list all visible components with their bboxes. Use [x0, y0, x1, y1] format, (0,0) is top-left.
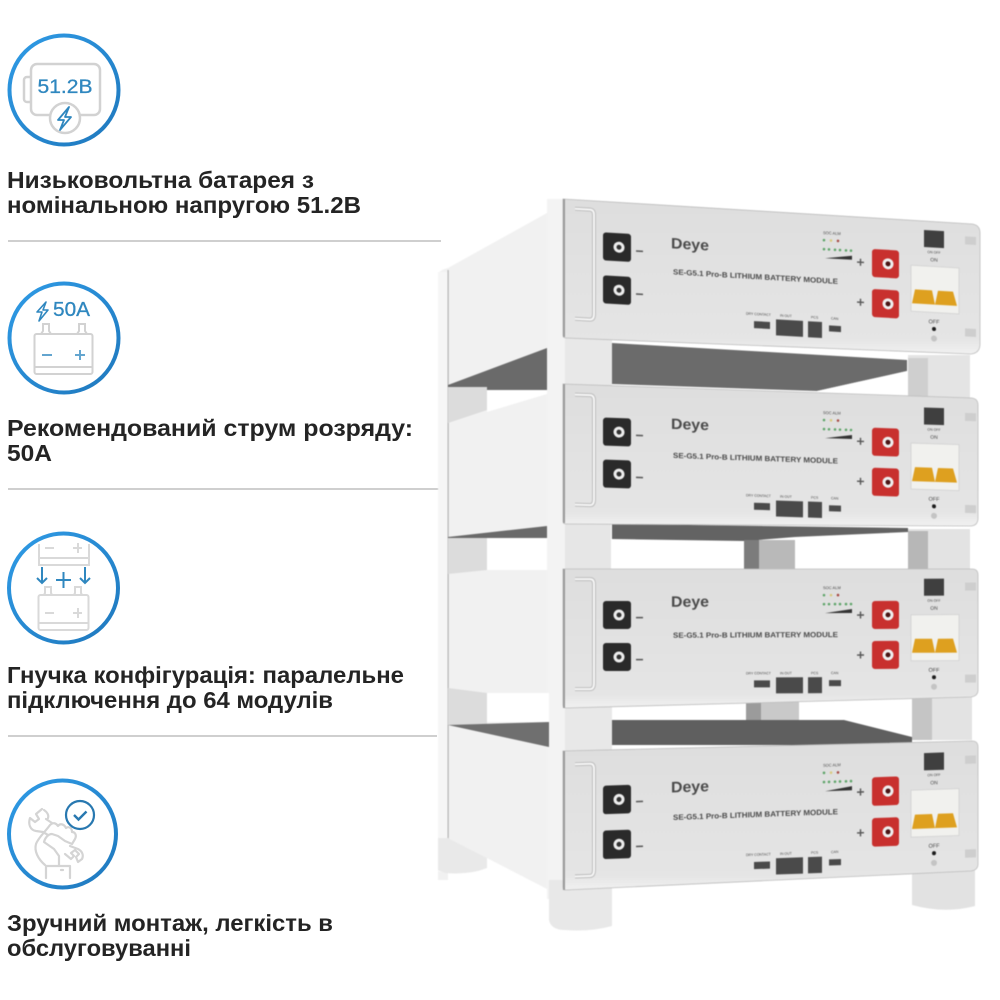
breaker: ON — [930, 257, 938, 264]
icon: 51.2V battery: 51.2В — [38, 77, 92, 98]
divider lines — [8, 240, 441, 737]
ports — [746, 312, 841, 339]
feature: nominal voltage — [7, 36, 361, 218]
ports — [746, 671, 841, 693]
gap two: under second module — [565, 522, 970, 570]
breaker: OFF — [929, 319, 940, 326]
gap one: under top module — [565, 338, 970, 400]
negative terminals — [603, 601, 643, 671]
handles — [575, 578, 976, 689]
gap three: under third module — [565, 695, 972, 753]
logo: Deye — [671, 594, 709, 611]
breaker — [911, 229, 959, 343]
module 2 — [563, 384, 978, 526]
module 4 controls — [575, 750, 976, 882]
feature: discharge current — [7, 284, 413, 466]
model label: SE-G5.1 Pro-B LITHIUM BATTERY MODULE — [673, 267, 838, 286]
ports: CAN — [831, 496, 839, 501]
breaker: OFF — [929, 843, 940, 850]
ports: PCS — [811, 671, 819, 675]
module 3 face — [563, 569, 978, 708]
heading: nominal voltage: Низьковольтна батарея з — [7, 167, 314, 193]
heading: nominal voltage: номінальною напругою 51.2В — [7, 192, 361, 218]
heading: easy installation: Зручний монтаж, легкість в — [7, 910, 333, 936]
rear foot — [438, 838, 487, 873]
breaker: ON — [930, 435, 938, 441]
module 3 controls — [575, 578, 976, 694]
icon: 51.2V battery — [10, 36, 118, 144]
heading: discharge current: Рекомендований струм розряду: — [7, 415, 413, 441]
positive terminals — [857, 248, 899, 318]
negative terminals — [603, 784, 643, 859]
ports: DRY CONTACT — [746, 493, 772, 498]
status leds — [823, 585, 852, 613]
heading: discharge current: 50А — [7, 440, 52, 466]
breaker: ON OFF — [927, 428, 941, 432]
breaker: ON — [930, 780, 938, 786]
front feet — [549, 860, 975, 930]
feature: parallel configuration — [7, 534, 404, 713]
icon: 50A battery — [10, 284, 118, 392]
status leds — [823, 410, 852, 439]
handles — [575, 395, 976, 518]
ports: PCS — [811, 496, 819, 500]
breaker: ON OFF — [927, 250, 941, 255]
ports — [746, 850, 841, 876]
ports: DRY CONTACT — [746, 852, 772, 857]
ports: DRY CONTACT — [746, 671, 772, 675]
gaps and shadows — [448, 348, 549, 747]
positive terminals — [857, 601, 899, 669]
status leds: SOC ALM — [823, 585, 841, 590]
status leds: SOC ALM — [823, 230, 841, 236]
icon: hand with wrench and check — [9, 780, 116, 888]
status leds — [823, 762, 852, 791]
status leds — [823, 230, 852, 260]
breaker: ON — [930, 606, 938, 612]
module 2 face — [563, 384, 978, 526]
module 2 controls — [575, 395, 976, 523]
logo: Deye — [671, 416, 709, 434]
positive terminals — [857, 776, 899, 847]
ports: IN OUT — [780, 495, 793, 499]
module 4 face — [563, 741, 978, 890]
model label: SE-G5.1 Pro-B LITHIUM BATTERY MODULE — [673, 807, 838, 822]
module 1 — [563, 199, 980, 354]
handles — [575, 209, 976, 342]
heading: parallel configuration: підключення до 64 модулів — [7, 687, 333, 713]
model label: SE-G5.1 Pro-B LITHIUM BATTERY MODULE — [673, 451, 838, 466]
module 3 — [563, 569, 978, 708]
handles — [575, 750, 976, 876]
icon: 50A battery: 50A — [53, 299, 91, 321]
breaker: ON OFF — [927, 599, 941, 603]
module 4 — [563, 741, 978, 890]
breaker: ON OFF — [927, 773, 941, 777]
breaker: OFF — [929, 497, 940, 503]
ports: PCS — [811, 851, 819, 855]
breaker — [911, 579, 959, 690]
feature: easy installation — [7, 780, 333, 961]
ports: CAN — [831, 671, 839, 675]
breaker — [911, 752, 959, 867]
ports — [746, 493, 841, 519]
status leds: SOC ALM — [823, 762, 841, 768]
ports: CAN — [831, 317, 839, 321]
battery rack — [438, 199, 980, 930]
positive terminals — [857, 427, 899, 497]
ports: IN OUT — [780, 671, 793, 675]
negative terminals — [603, 232, 643, 306]
icon: parallel batteries — [9, 534, 118, 642]
ports: PCS — [811, 315, 819, 320]
negative terminals — [603, 418, 643, 489]
ports: IN OUT — [780, 314, 793, 318]
model label: SE-G5.1 Pro-B LITHIUM BATTERY MODULE — [673, 630, 838, 640]
ports: IN OUT — [780, 852, 793, 856]
heading: easy installation: обслуговуванні — [7, 935, 191, 961]
rack frame — [438, 199, 975, 930]
ports: DRY CONTACT — [746, 312, 772, 317]
logo: Deye — [671, 235, 709, 254]
ports: CAN — [831, 850, 839, 854]
logo: Deye — [671, 778, 709, 797]
breaker: OFF — [928, 668, 940, 674]
module 1 face — [563, 199, 980, 354]
side panels — [438, 199, 565, 899]
heading: parallel configuration: Гнучка конфігурація: паралельне — [7, 662, 404, 688]
module 1 controls — [575, 209, 976, 347]
breaker — [911, 407, 959, 520]
status leds: SOC ALM — [823, 410, 841, 416]
